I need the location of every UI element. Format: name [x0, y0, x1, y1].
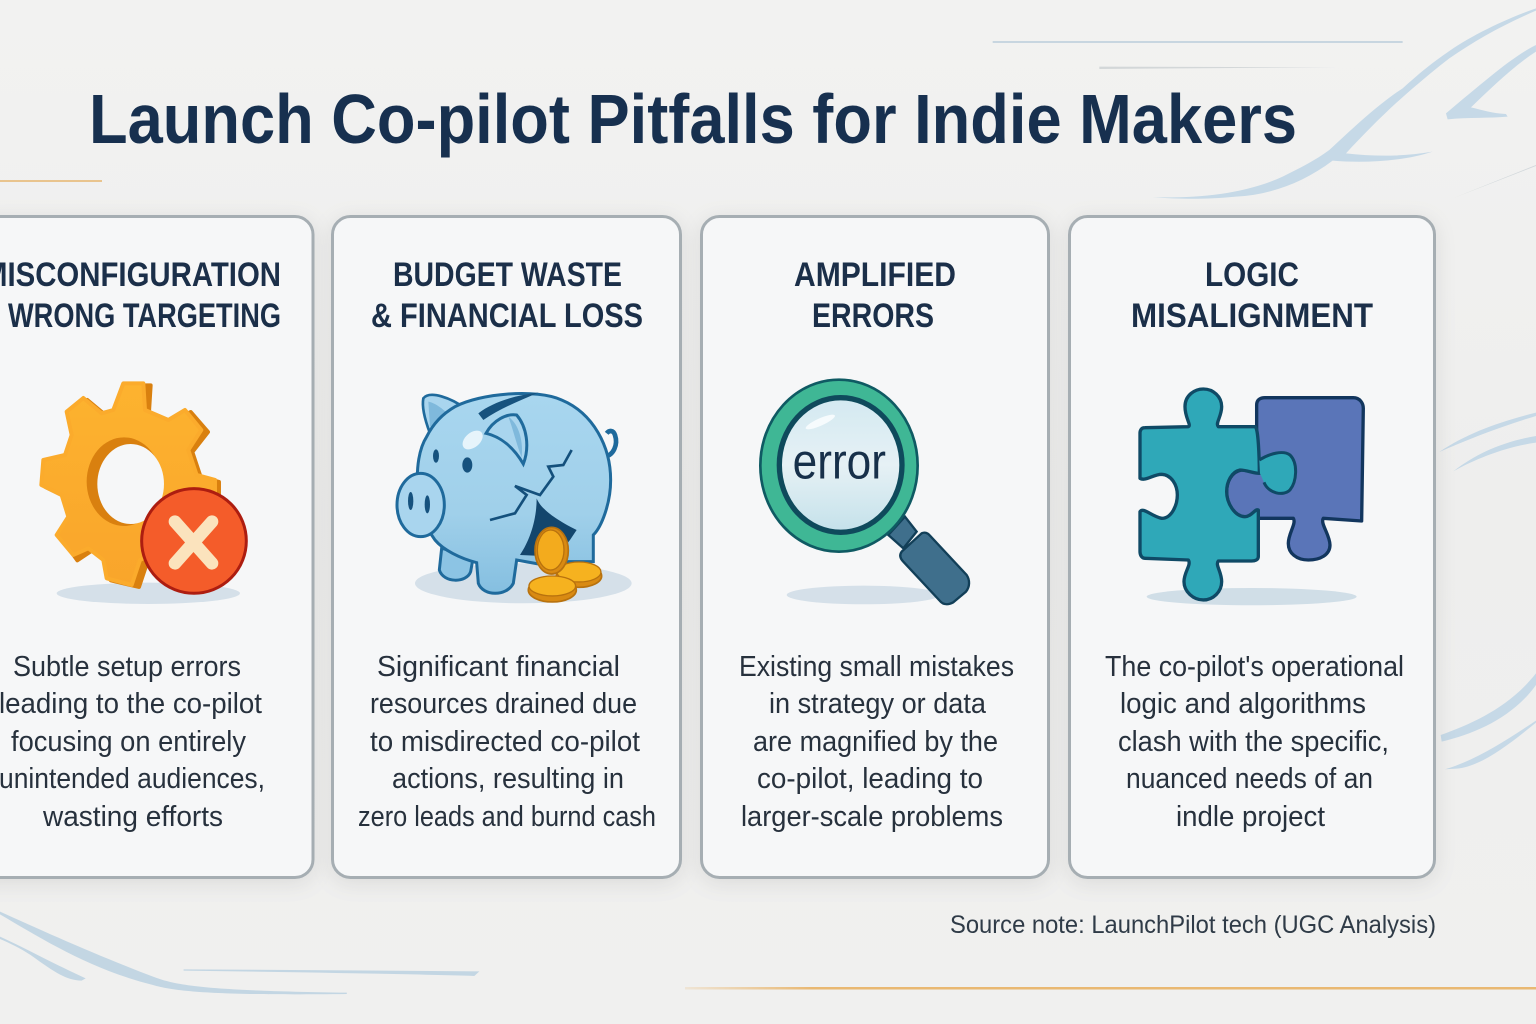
heading 2 — [371, 256, 643, 335]
source note: Source note: LaunchPilot tech (UGC Analysis) — [950, 911, 1436, 939]
panel: budget waste and financial loss — [332, 216, 680, 878]
heading 3: AMPLIFIED — [794, 256, 956, 294]
body text 2: to misdirected co-pilot — [370, 726, 640, 758]
body text 3: larger-scale problems — [741, 801, 1003, 833]
body text 1: leading to the co-pilot — [0, 688, 262, 720]
body text 4: nuanced needs of an — [1126, 763, 1373, 795]
body text 3: Existing small mistakes — [739, 651, 1014, 683]
icon: gear with error badge — [41, 383, 246, 604]
panel: logic misalignment — [1070, 216, 1434, 878]
body text 2 — [358, 651, 656, 833]
panel: amplified errors — [702, 216, 1048, 878]
body text 4: logic and algorithms — [1120, 688, 1366, 720]
body text 2: Significant financial — [377, 651, 620, 683]
heading 2: & FINANCIAL LOSS — [371, 297, 643, 335]
panel: misconfiguration and wrong targeting — [0, 216, 313, 878]
body text 1: wasting efforts — [42, 801, 223, 833]
icon: magnifying glass over error — [760, 380, 969, 604]
decorative line: top left orange — [0, 180, 102, 182]
body text 3 — [739, 651, 1014, 833]
card background 2 — [332, 216, 680, 878]
heading 1 — [0, 256, 281, 335]
icon: magnifying glass over error: error — [793, 433, 886, 489]
title: Launch Co-pilot Pitfalls for Indie Makers — [89, 80, 1297, 158]
icon: cracked piggy bank with coins — [397, 393, 632, 603]
heading 3 — [794, 256, 956, 335]
heading 1: WRONG TARGETING — [8, 297, 281, 335]
body text 1 — [0, 651, 265, 833]
body text 4: indle project — [1176, 801, 1325, 833]
decorative swooshes: top right — [993, 8, 1536, 199]
card background 3 — [702, 216, 1048, 878]
body text 4 — [1105, 651, 1404, 833]
decorative line: bottom right orange — [685, 987, 1536, 990]
heading 3: ERRORS — [812, 297, 934, 335]
body text 1: Subtle setup errors — [13, 651, 241, 683]
body text 4: clash with the specific, — [1118, 726, 1389, 758]
body text 2: actions, resulting in — [392, 763, 624, 795]
body text 3: are magnified by the — [753, 726, 998, 758]
body text 2: zero leads and burnd cash — [358, 801, 656, 833]
decorative swooshes: right side — [1439, 413, 1536, 769]
card background 1 — [0, 216, 313, 878]
icon: mismatched puzzle pieces — [1140, 389, 1363, 605]
decorative swooshes: bottom left — [0, 912, 479, 994]
heading 4: MISALIGNMENT — [1131, 297, 1373, 335]
body text 1: unintended audiences, — [0, 763, 265, 795]
body text 3: co-pilot, leading to — [757, 763, 983, 795]
body text 1: focusing on entirely — [11, 726, 246, 758]
body text 3: in strategy or data — [769, 688, 987, 720]
body text 2: resources drained due — [370, 688, 637, 720]
body text 4: The co-pilot's operational — [1105, 651, 1404, 683]
heading 2: BUDGET WASTE — [393, 256, 622, 294]
heading 4 — [1131, 256, 1373, 335]
heading 4: LOGIC — [1205, 256, 1299, 294]
card background 4 — [1070, 216, 1434, 878]
